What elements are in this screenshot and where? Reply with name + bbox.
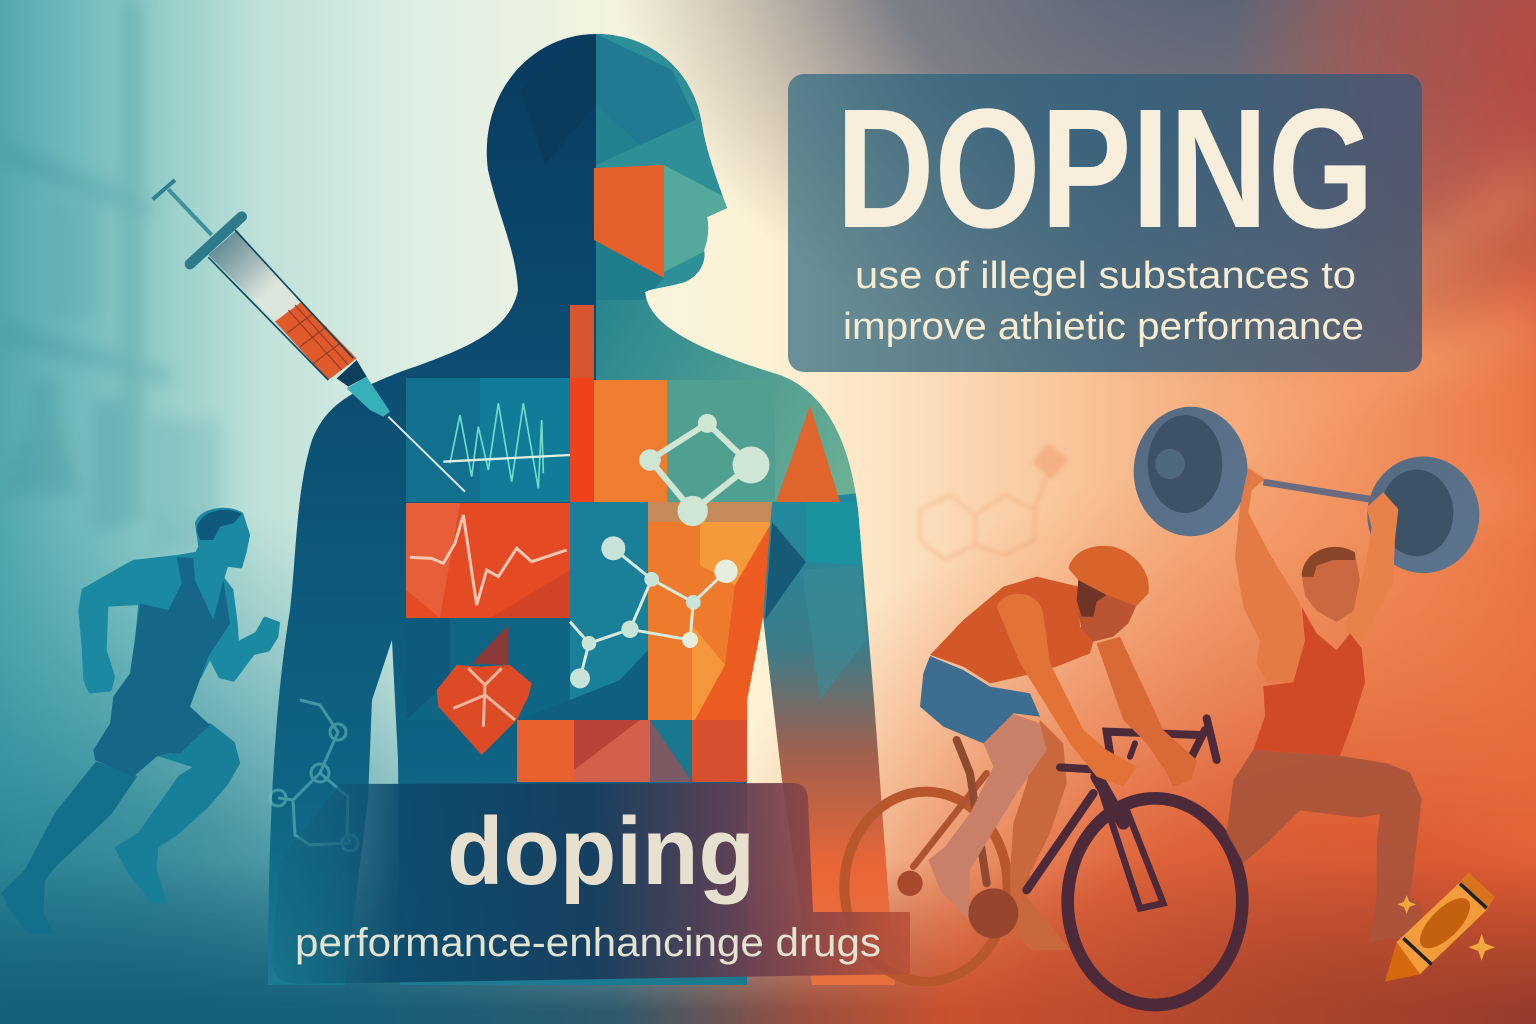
main title: DOPING: [836, 74, 1374, 264]
lifter left arm: [1235, 468, 1305, 682]
cyclist near arm: [997, 594, 1137, 787]
head facets: [520, 30, 736, 300]
icon: molecule upper: [639, 414, 769, 526]
runner figure: [3, 509, 278, 933]
cyclist face: [1077, 580, 1137, 642]
cyclist shorts: [920, 656, 1040, 743]
weightlifter figure: [1134, 407, 1479, 942]
cyclist torso: [930, 577, 1093, 683]
subtitle line 1: use of illegel substances to: [855, 255, 1356, 297]
runner rear leg: [3, 763, 135, 933]
title panel: [788, 74, 1422, 372]
caption panel: [272, 783, 910, 984]
icon: crayon with sparkles: [1385, 872, 1495, 982]
silhouette neck and shoulder: [596, 280, 886, 520]
bicycle rear wheel: [844, 792, 1008, 982]
bicycle front wheel and frame: [1027, 718, 1242, 1005]
title panel background: [788, 74, 1422, 372]
lifter right arm: [1343, 492, 1398, 645]
runner front leg: [117, 725, 238, 902]
caption subheading: performance-enhancinge drugs: [295, 921, 881, 965]
central human silhouette: [260, 20, 910, 1000]
icon: faceted heart: [437, 625, 532, 755]
lifter hips and legs: [1227, 750, 1422, 942]
barbell bar: [1263, 482, 1373, 500]
cyclist helmet: [1068, 546, 1149, 606]
barbell right plate: [1367, 456, 1479, 573]
cyclist hair: [1077, 580, 1107, 617]
right arm facets: [765, 502, 866, 700]
runner upper body: [80, 509, 278, 692]
background: faded lab scene: [0, 0, 220, 550]
ghost molecule on left arm: [270, 700, 358, 851]
bicycle rear frame: [897, 740, 987, 896]
icon: syringe: [153, 180, 465, 492]
right arm gradient: [763, 494, 895, 985]
torso mosaic: [406, 305, 840, 782]
lifter head: [1302, 547, 1360, 622]
cyclist far leg: [1010, 720, 1070, 950]
background: faded molecule on the right: [920, 443, 1068, 560]
caption heading: doping: [447, 798, 755, 905]
orange face block: [594, 165, 664, 278]
lifter hair: [1302, 547, 1355, 577]
cyclist figure: [844, 546, 1242, 1005]
runner hair: [197, 510, 242, 540]
runner tank and shorts: [93, 557, 230, 777]
lifter singlet: [1253, 607, 1365, 756]
triangle on shoulder: [776, 406, 840, 502]
subtitle line 2: improve athietic performance: [843, 306, 1364, 348]
bicycle crank: [968, 888, 1018, 938]
icon: molecule lower: [570, 536, 738, 688]
icon: heart rate on red panel: [410, 515, 567, 605]
barbell left plate: [1134, 407, 1248, 536]
silhouette left body: [260, 20, 760, 1000]
icon: ECG trace: [443, 403, 570, 488]
cyclist near leg: [928, 713, 1047, 920]
cyclist far arm: [1097, 637, 1197, 787]
caption background: [272, 783, 910, 984]
